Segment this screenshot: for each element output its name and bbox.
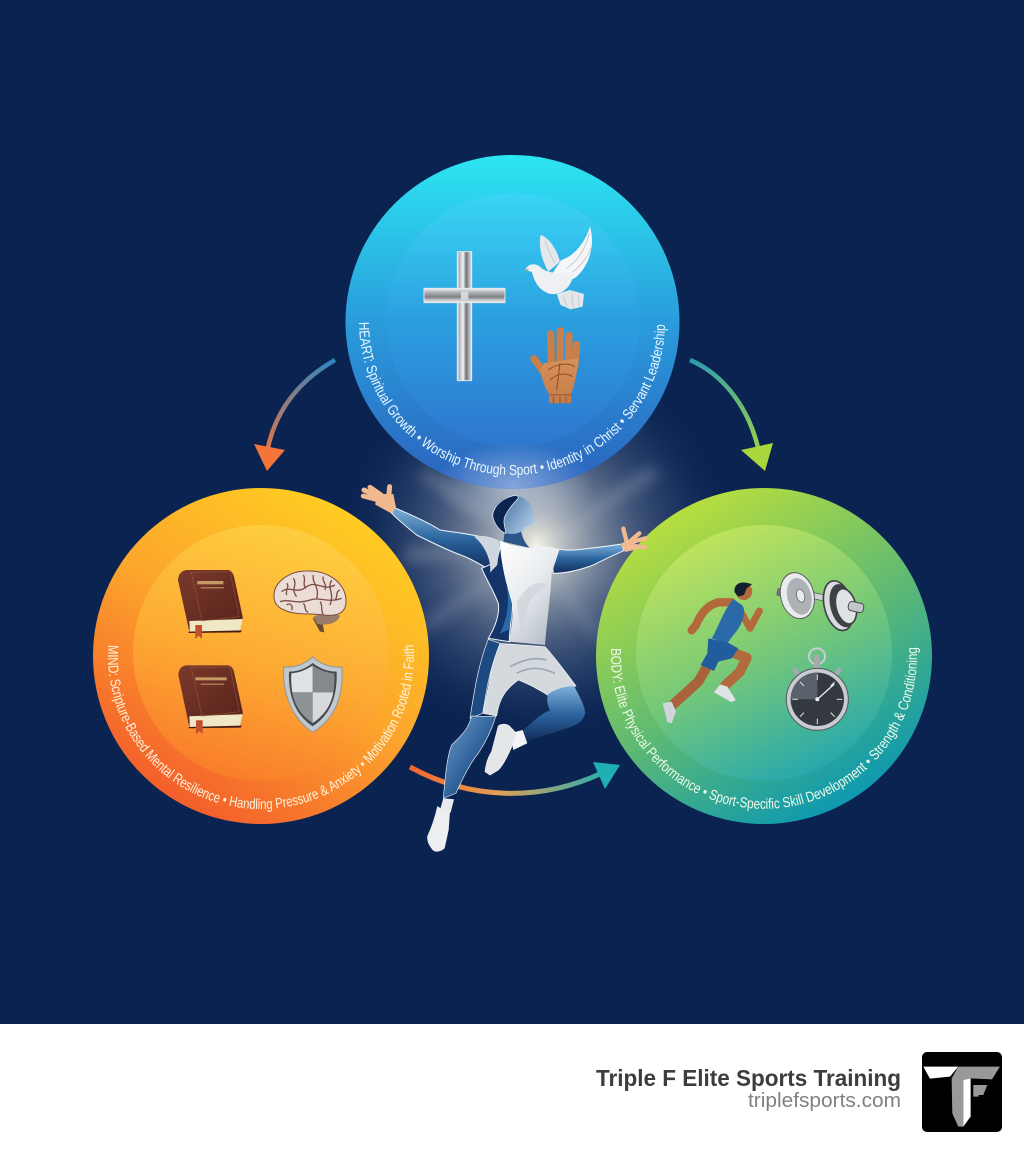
footer brand name: Triple F Elite Sports Training <box>596 1065 901 1091</box>
shirt <box>500 541 559 645</box>
footer panel <box>0 1024 1024 1154</box>
panel: body circle <box>596 488 932 824</box>
arrow: heart to body <box>690 360 773 471</box>
heart caption: HEART: Spiritual Growth • Worship Through Sport • Identity in Christ • Servant Leadership <box>359 322 668 478</box>
shorts <box>483 643 576 716</box>
lower shoe <box>427 806 450 852</box>
panel: heart circle <box>346 155 680 519</box>
raised leg <box>522 686 585 742</box>
right hand <box>621 529 645 552</box>
lower sock <box>440 798 454 813</box>
icon: open hand <box>534 331 579 403</box>
icon: book lower <box>178 665 243 734</box>
icon: shield <box>284 657 342 732</box>
mind caption: MIND: Scripture-Based Mental Resilience • Handling Pressure & Anxiety • Motivation Rooted in Faith <box>108 645 414 812</box>
left arm <box>392 507 498 570</box>
panel: mind circle <box>93 488 429 824</box>
right arm <box>551 544 624 573</box>
icon: book upper <box>178 570 243 639</box>
footer website: triplefsports.com <box>748 1090 901 1112</box>
central light burst <box>337 345 737 745</box>
body caption: BODY: Elite Physical Performance • Sport-Specific Skill Development • Strength & Conditioning <box>611 648 920 811</box>
rear torso <box>482 545 513 642</box>
arrow: mind to body <box>410 762 620 793</box>
icon: brain <box>274 571 346 632</box>
neck <box>503 528 530 548</box>
head <box>493 496 535 534</box>
left hand <box>363 487 396 513</box>
logo <box>922 1052 1002 1132</box>
icon: dove <box>525 227 592 309</box>
lower leg <box>443 716 496 798</box>
athlete figure <box>363 487 645 852</box>
raised shoe <box>485 724 517 775</box>
arrow: heart to mind <box>254 360 335 471</box>
icon: silver cross <box>424 252 505 381</box>
icon: stopwatch <box>786 648 848 730</box>
icon: runner <box>663 582 759 723</box>
raised sock <box>510 730 527 750</box>
icon: dumbbell <box>775 569 864 634</box>
